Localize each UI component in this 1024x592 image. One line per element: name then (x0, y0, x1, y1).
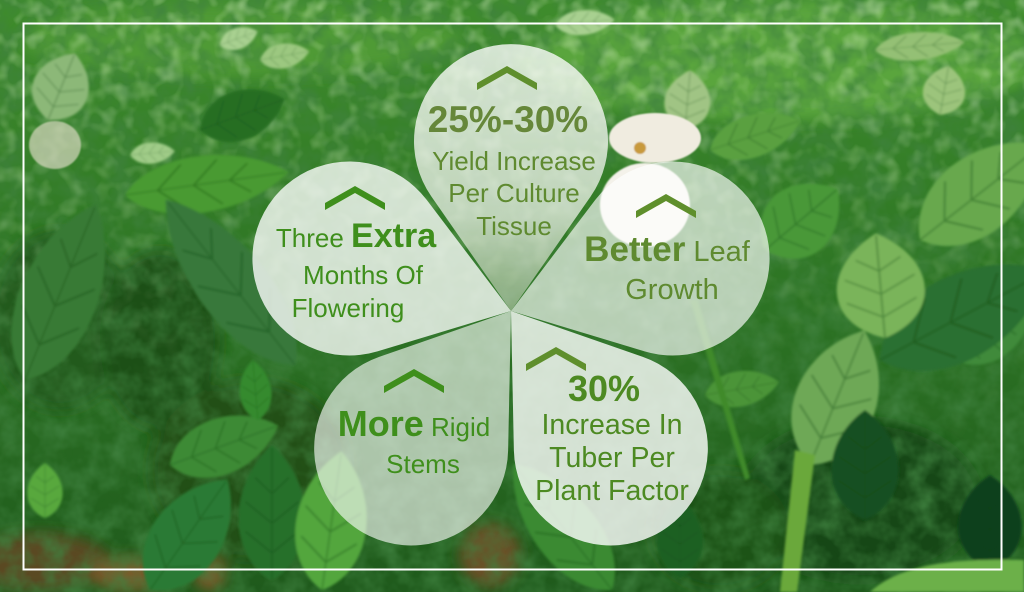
petal: flowering (227, 136, 541, 403)
text: better leaf growth: Better (584, 230, 686, 269)
heading: 30%: 30% (568, 368, 640, 409)
lower centre leaves (512, 464, 616, 592)
text: increase in tuber: Tuber Per (549, 442, 675, 474)
icon: chevron (477, 66, 537, 90)
petal: yield increase (414, 44, 608, 311)
petal: rigid stems (276, 254, 589, 584)
icon: chevron (325, 186, 385, 210)
flower (29, 113, 701, 247)
petal: tuber factor (433, 254, 746, 584)
right leaves (710, 114, 798, 160)
left leaves (126, 154, 288, 214)
icon: chevron (526, 347, 586, 371)
icon: chevron (384, 369, 444, 393)
heading: 25%-30%: 25%-30% (428, 99, 588, 140)
text: yield increase: Tissue (476, 211, 552, 241)
text: three extra months: Months Of (303, 260, 424, 290)
text: better leaf growth: Leaf (685, 236, 751, 268)
text: yield increase: Per Culture (448, 178, 580, 208)
text: increase in tuber: Increase In (542, 409, 682, 441)
small leaves top (31, 52, 90, 122)
text: more rigid stems: Rigid (424, 412, 490, 442)
text: three extra months: Extra (351, 217, 437, 255)
text: better leaf growth: Growth (625, 274, 719, 306)
petal: better leaf growth (481, 136, 795, 403)
text: three extra months: Flowering (292, 293, 404, 323)
text: increase in tuber: Plant Factor (535, 475, 689, 507)
text: more rigid stems: More (338, 403, 424, 444)
text: more rigid stems: Stems (386, 449, 460, 479)
text: three extra months: Three (276, 223, 351, 253)
text: yield increase: Yield Increase (432, 146, 596, 176)
icon: chevron (636, 194, 696, 218)
